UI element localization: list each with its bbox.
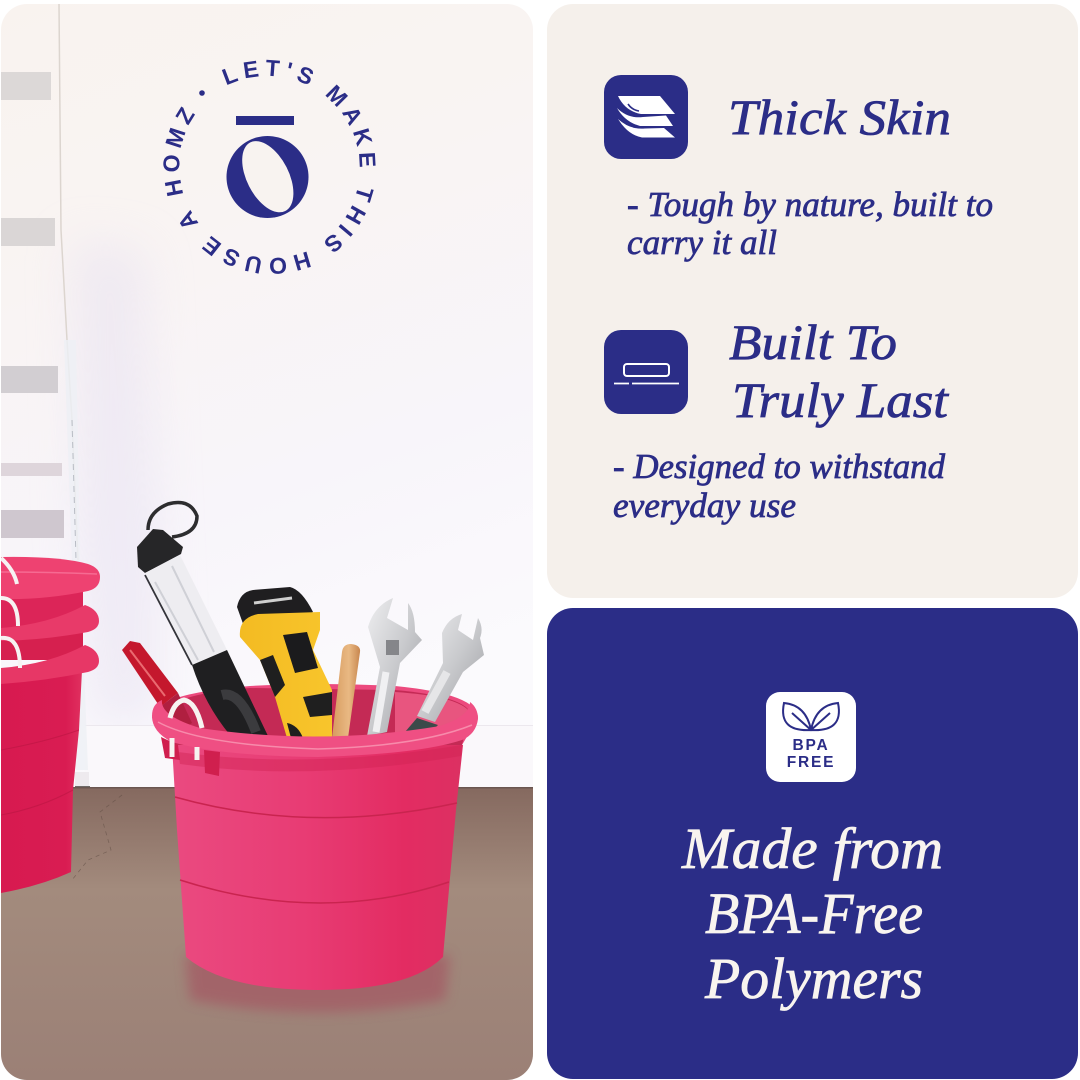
icon: layers xyxy=(604,75,688,159)
baseboard xyxy=(85,725,535,787)
main pink tub xyxy=(122,502,484,990)
rim tabs xyxy=(161,737,220,776)
rope handle xyxy=(170,700,202,760)
panel: features xyxy=(547,4,1078,598)
wall shadow xyxy=(88,266,150,712)
panel: BPA free xyxy=(547,608,1078,1079)
heading: Thick Skin: Thick Skin xyxy=(728,89,951,145)
floor xyxy=(1,787,533,1080)
yellow torch xyxy=(237,587,332,738)
text: Thick Skin description: - Tough by nature, built to xyxy=(627,185,993,224)
separator dot xyxy=(199,90,205,96)
text: Thick Skin description: carry it all xyxy=(627,223,777,262)
heading: Built To Truly Last: Built To xyxy=(729,314,897,370)
icon: BPA free badge: BPA xyxy=(793,737,829,754)
heading: Made from BPA-Free Polymers: BPA-Free xyxy=(705,881,923,946)
floor reflection xyxy=(185,955,450,1012)
work light xyxy=(137,502,268,736)
circular logo badge xyxy=(163,60,376,274)
heading: Made from BPA-Free Polymers: Polymers xyxy=(704,946,923,1011)
panel: product photo xyxy=(1,4,535,1080)
text: Built To Last description: - Designed to withstand xyxy=(613,447,945,486)
handle xyxy=(192,650,268,736)
tub rim front xyxy=(152,700,478,757)
tub rim back and interior xyxy=(152,684,478,745)
circular slogan: LET'S MAKE THIS HOUSE A HOMZ xyxy=(163,60,376,274)
screwdriver xyxy=(122,641,192,732)
text: Built To Last description: everyday use xyxy=(613,486,796,525)
hanging loop xyxy=(148,502,197,537)
stacked pink tubs xyxy=(1,557,100,893)
ladder xyxy=(1,4,90,808)
icon: scratch line xyxy=(604,330,688,414)
heading: Made from BPA-Free Polymers: Made from xyxy=(681,816,943,881)
icon: BPA free badge: FREE xyxy=(787,754,835,771)
tub body xyxy=(172,745,463,990)
wooden handle xyxy=(332,644,360,738)
logo mark bar xyxy=(236,116,294,125)
icon: BPA free badge xyxy=(766,692,856,782)
clear tube xyxy=(145,555,227,665)
heading: Built To Truly Last: Truly Last xyxy=(732,372,949,428)
logo mark ring xyxy=(227,136,309,218)
large wrench xyxy=(367,598,422,736)
small wrench xyxy=(405,614,484,732)
wall background xyxy=(1,4,533,668)
